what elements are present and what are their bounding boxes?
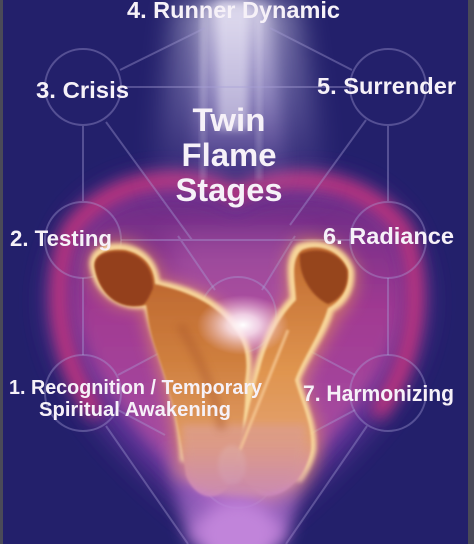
tree of life diagram bbox=[45, 28, 426, 544]
bottom light bbox=[160, 445, 315, 544]
label: stage 1 bbox=[9, 377, 263, 421]
outer glow bbox=[88, 238, 358, 505]
label: stage 5: 5. Surrender bbox=[317, 73, 456, 99]
light beam bbox=[150, 0, 330, 210]
figures: embracing couple bbox=[88, 238, 358, 505]
label: stage 1: Spiritual Awakening bbox=[39, 399, 231, 421]
clasped hands bbox=[218, 445, 246, 485]
man head bbox=[95, 252, 153, 306]
title: Flame bbox=[182, 137, 276, 173]
label: stage 6: 6. Radiance bbox=[323, 223, 454, 249]
woman arm highlight bbox=[240, 330, 288, 450]
heart light bbox=[197, 295, 289, 355]
woman bbox=[240, 247, 348, 496]
title: Stages bbox=[176, 172, 282, 208]
title bbox=[176, 102, 282, 208]
label: stage 3: 3. Crisis bbox=[36, 77, 129, 103]
label: stage 2: 2. Testing bbox=[10, 226, 112, 251]
bright rim bbox=[91, 243, 352, 480]
title: Twin bbox=[192, 102, 266, 138]
heart aura bbox=[49, 177, 425, 544]
lower bodies blend bbox=[182, 425, 306, 498]
man bbox=[95, 250, 246, 496]
label: stage 1: 1. Recognition / Temporary bbox=[9, 377, 263, 399]
label: stage 7: 7. Harmonizing bbox=[303, 381, 454, 406]
woman hair bbox=[300, 251, 347, 304]
stage labels bbox=[9, 0, 456, 421]
